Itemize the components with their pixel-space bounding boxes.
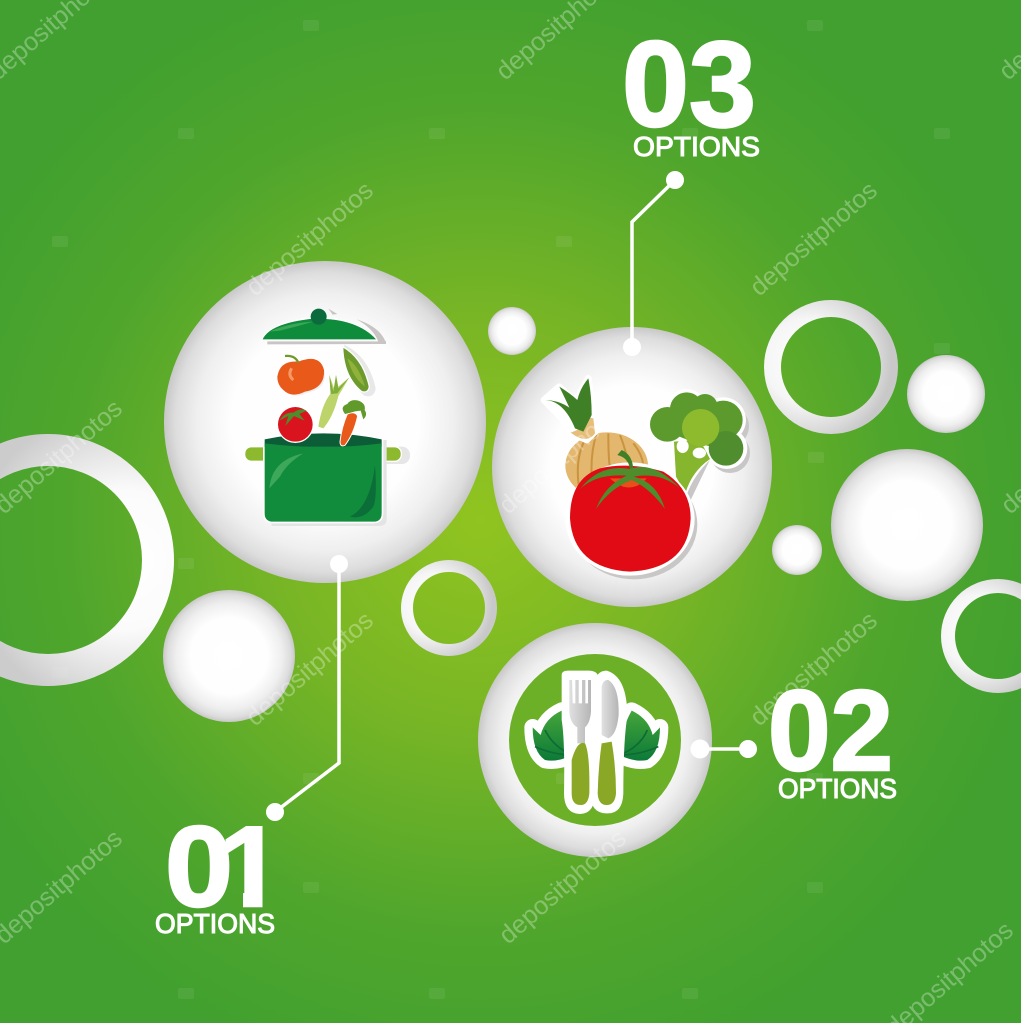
connector: 02 [690, 740, 757, 758]
disc: small right [772, 525, 822, 575]
pot handles [244, 446, 410, 464]
orange pepper [277, 356, 327, 397]
fork [562, 671, 598, 814]
label: 01 options: 0 [165, 804, 233, 931]
red tomato [277, 406, 314, 443]
tomato [565, 450, 697, 579]
ring: upper right [772, 308, 890, 426]
leaves [533, 711, 660, 761]
label: 01 options: OPTIONS [155, 908, 275, 939]
disc: small centre [488, 307, 536, 355]
broccoli [647, 389, 750, 501]
icon: pot with vegetables [244, 309, 410, 526]
watermarks: depositphotos [494, 824, 632, 950]
ring: small centre [407, 566, 491, 650]
ring: right edge [948, 586, 1021, 686]
ring: far left [0, 450, 158, 670]
disc: large right [831, 449, 983, 601]
label: 03 options: 03 [622, 16, 756, 152]
watermarks: depositphotos [494, 394, 632, 520]
watermarks: depositphotos [745, 606, 883, 732]
connector: 01 [266, 555, 348, 821]
watermarks: depositphotos [241, 176, 379, 302]
connector: 03 [623, 171, 684, 356]
icon: onion, broccoli and tomato [544, 378, 750, 579]
label: 01 options: 1 [219, 804, 282, 931]
label: 02 options: OPTIONS [778, 773, 897, 804]
onion [544, 378, 650, 500]
leaf veins [535, 730, 658, 755]
watermarks: depositphotos [241, 606, 379, 732]
panel: cooking pot circle [164, 261, 486, 583]
disc: upper right [907, 355, 985, 433]
knife [590, 671, 627, 813]
disc: lower left [163, 590, 295, 722]
leek [318, 375, 349, 428]
pot body [265, 433, 387, 526]
label: 03 options: OPTIONS [633, 131, 760, 162]
carrot [340, 400, 366, 446]
lid [261, 309, 386, 344]
icon: fork, knife and leaves [533, 671, 660, 814]
label: 02 options: 02 [768, 668, 893, 795]
pea pod [343, 347, 373, 394]
panel: vegetables circle [492, 327, 772, 607]
label: 01 options [156, 824, 274, 934]
watermarks: depositphotos [745, 176, 883, 302]
panel: cutlery circle [478, 623, 712, 857]
